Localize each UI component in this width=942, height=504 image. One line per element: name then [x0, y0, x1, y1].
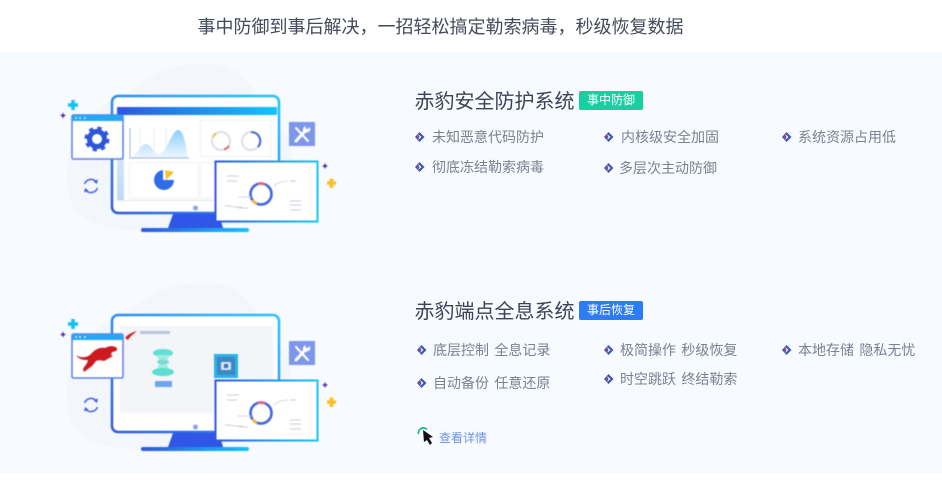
feature item: 时空跳跃 终结勒索 [620, 371, 737, 387]
tag: 事中防御 [579, 91, 643, 110]
icon: cursor with green arc [418, 427, 433, 445]
feature item: 内核级安全加固 [621, 129, 719, 145]
feature item: 底层控制 全息记录 [433, 342, 550, 358]
title: 事中防御到事后解决，一招轻松搞定勒索病毒，秒级恢复数据 [198, 17, 684, 37]
feature item: 系统资源占用低 [798, 129, 896, 145]
tag: 事后恢复 [579, 301, 643, 320]
feature item: 本地存储 隐私无忧 [798, 342, 915, 358]
feature item: 自动备份 任意还原 [433, 375, 550, 391]
feature item: 多层次主动防御 [619, 160, 717, 176]
tag: 事中防御: 事中防御 [587, 93, 635, 107]
illustration: security monitor dashboard [60, 94, 337, 233]
heading: 赤豹端点全息系统: 赤豹端点全息系统 [414, 301, 574, 323]
feature item: 未知恶意代码防护 [432, 129, 544, 145]
tag: 事后恢复: 事后恢复 [587, 303, 635, 317]
feature item: 彻底冻结勒索病毒 [432, 159, 544, 175]
feature item: 极简操作 秒级恢复 [620, 342, 737, 358]
heading: 赤豹安全防护系统: 赤豹安全防护系统 [414, 91, 574, 113]
illustration: endpoint holographic monitor [60, 312, 337, 452]
link: 查看详情: 查看详情 [439, 431, 487, 445]
